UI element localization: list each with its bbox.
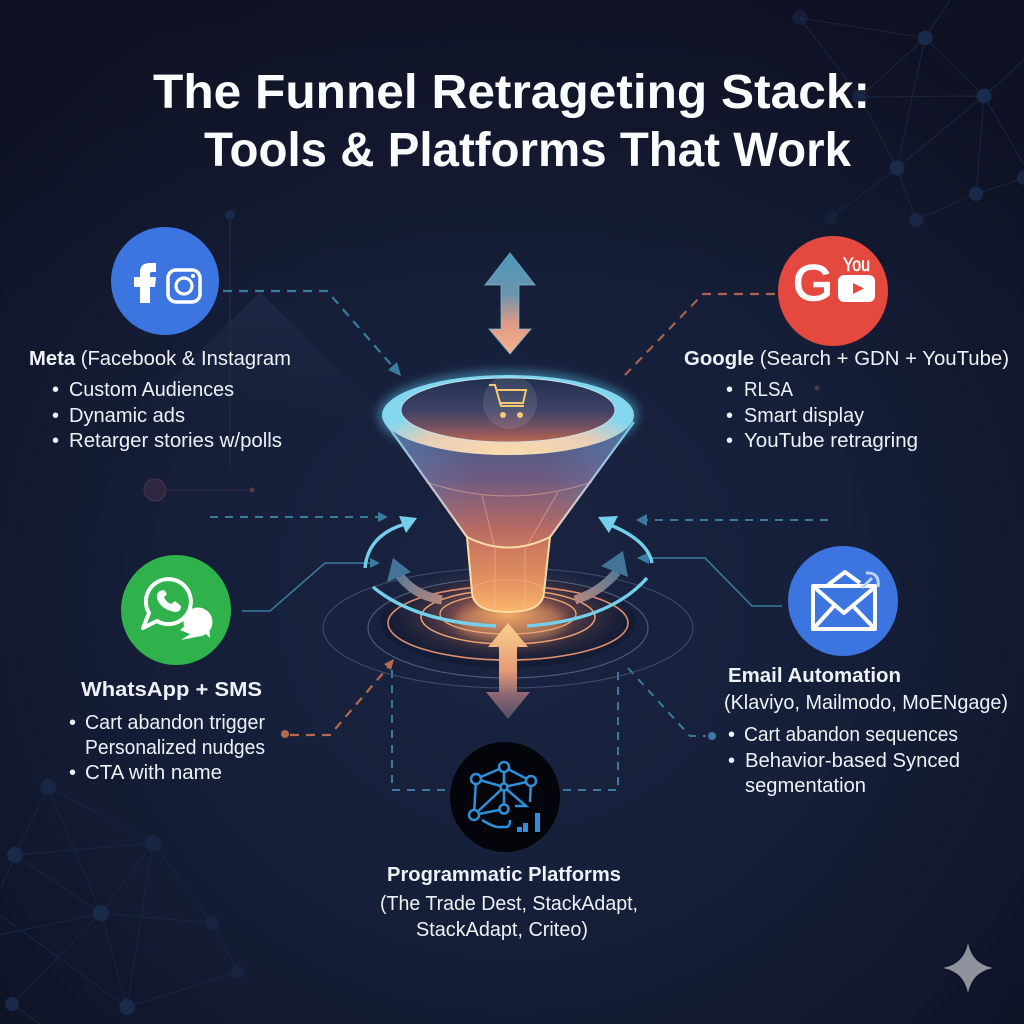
icon: WhatsApp chat bubbles (121, 555, 231, 665)
arc lower left (373, 587, 496, 626)
icon: email envelope (788, 546, 898, 656)
list: Email features: Cart abandon sequences (744, 724, 958, 746)
text: programmatic tools (380, 893, 638, 941)
heading: Meta: Meta (Facebook & Instagram (29, 348, 291, 370)
arrow: bottom double-headed (486, 623, 530, 719)
funnel (378, 371, 638, 612)
list: Google features: RLSA (744, 379, 794, 401)
icon: shopping cart (483, 375, 537, 429)
list: WhatsApp features: Cart abandon trigger (85, 712, 265, 734)
inner arrow left (387, 558, 442, 600)
title: Tools & Platforms That Work (204, 124, 851, 177)
text: programmatic tools: (The Trade Dest, StackAdapt, (380, 893, 638, 915)
list: Meta features: Retarger stories w/polls (69, 430, 282, 452)
icon: Google and YouTube: G (793, 255, 833, 311)
text: email tools: (Klaviyo, Mailmodo, MoENgage) (724, 692, 1008, 714)
connector: Google to funnel (625, 294, 775, 375)
panel: Programmatic Platforms (380, 742, 638, 941)
base rings (323, 565, 693, 688)
list: WhatsApp features (69, 712, 265, 784)
text: programmatic tools: StackAdapt, Criteo) (416, 919, 588, 941)
connector: right middle (636, 514, 828, 526)
connector: programmatic right (560, 672, 618, 790)
funnel glow (378, 371, 638, 459)
list: Google features: YouTube retragring (744, 430, 918, 452)
icon: Facebook and Instagram (111, 227, 219, 335)
inner arrow right (575, 551, 628, 600)
arrow: top double-headed (485, 253, 535, 354)
arc upper right (598, 516, 652, 563)
list: Meta features: Custom Audiences (69, 379, 234, 401)
list: Meta features (52, 379, 282, 452)
list: Meta features: Dynamic ads (69, 405, 185, 427)
panel: WhatsApp + SMS (69, 555, 265, 784)
connector: WhatsApp dashed to rings (281, 659, 394, 738)
list: WhatsApp features: • (69, 712, 76, 734)
list: Meta features: • (52, 430, 59, 452)
connector: programmatic left (392, 670, 450, 790)
panel: Google (684, 236, 1009, 452)
list: Google features: Smart display (744, 405, 864, 427)
list: Email features: Behavior-based Synced (745, 750, 960, 772)
funnel rim (382, 375, 634, 455)
title: The Funnel Retrageting Stack: (153, 66, 870, 119)
icon: Google and YouTube: You (843, 255, 870, 276)
funnel neck (467, 537, 550, 612)
connector: Meta to funnel (223, 291, 401, 376)
list: Email features: • (728, 724, 735, 746)
connector: Email dashed to rings (628, 668, 716, 740)
arrows: circular flow (365, 516, 652, 626)
list: Email features: segmentation (745, 775, 866, 797)
list: Google features: • (726, 379, 733, 401)
funnel mouth (401, 378, 615, 442)
heading: Google: Google (Search + GDN + YouTube) (684, 348, 1009, 370)
funnel cone (385, 420, 634, 548)
connector: WhatsApp to funnel (242, 558, 380, 611)
panel: Meta (29, 227, 291, 452)
connector: Email to funnel (637, 552, 782, 606)
list: Email features: • (728, 750, 735, 772)
heading: Programmatic Platforms: Programmatic Platforms (387, 864, 621, 886)
list: WhatsApp features: Personalized nudges (85, 737, 265, 759)
list: Google features (726, 379, 918, 452)
list: Email features (728, 724, 960, 797)
icon: programmatic network (450, 742, 560, 852)
list: Meta features: • (52, 379, 59, 401)
icon: Google and YouTube (778, 236, 888, 346)
arc lower right (527, 578, 647, 626)
panel: Email Automation (724, 546, 1008, 797)
heading: WhatsApp + SMS: WhatsApp + SMS (81, 679, 262, 701)
list: Google features: • (726, 430, 733, 452)
title (153, 66, 870, 177)
list: WhatsApp features: CTA with name (85, 762, 222, 784)
list: Meta features: • (52, 405, 59, 427)
heading: Email Automation: Email Automation (728, 665, 901, 687)
list: WhatsApp features: • (69, 762, 76, 784)
arc upper left (365, 516, 417, 568)
list: Google features: • (726, 405, 733, 427)
icon: sparkle (943, 943, 993, 993)
connector: left middle (210, 512, 388, 522)
